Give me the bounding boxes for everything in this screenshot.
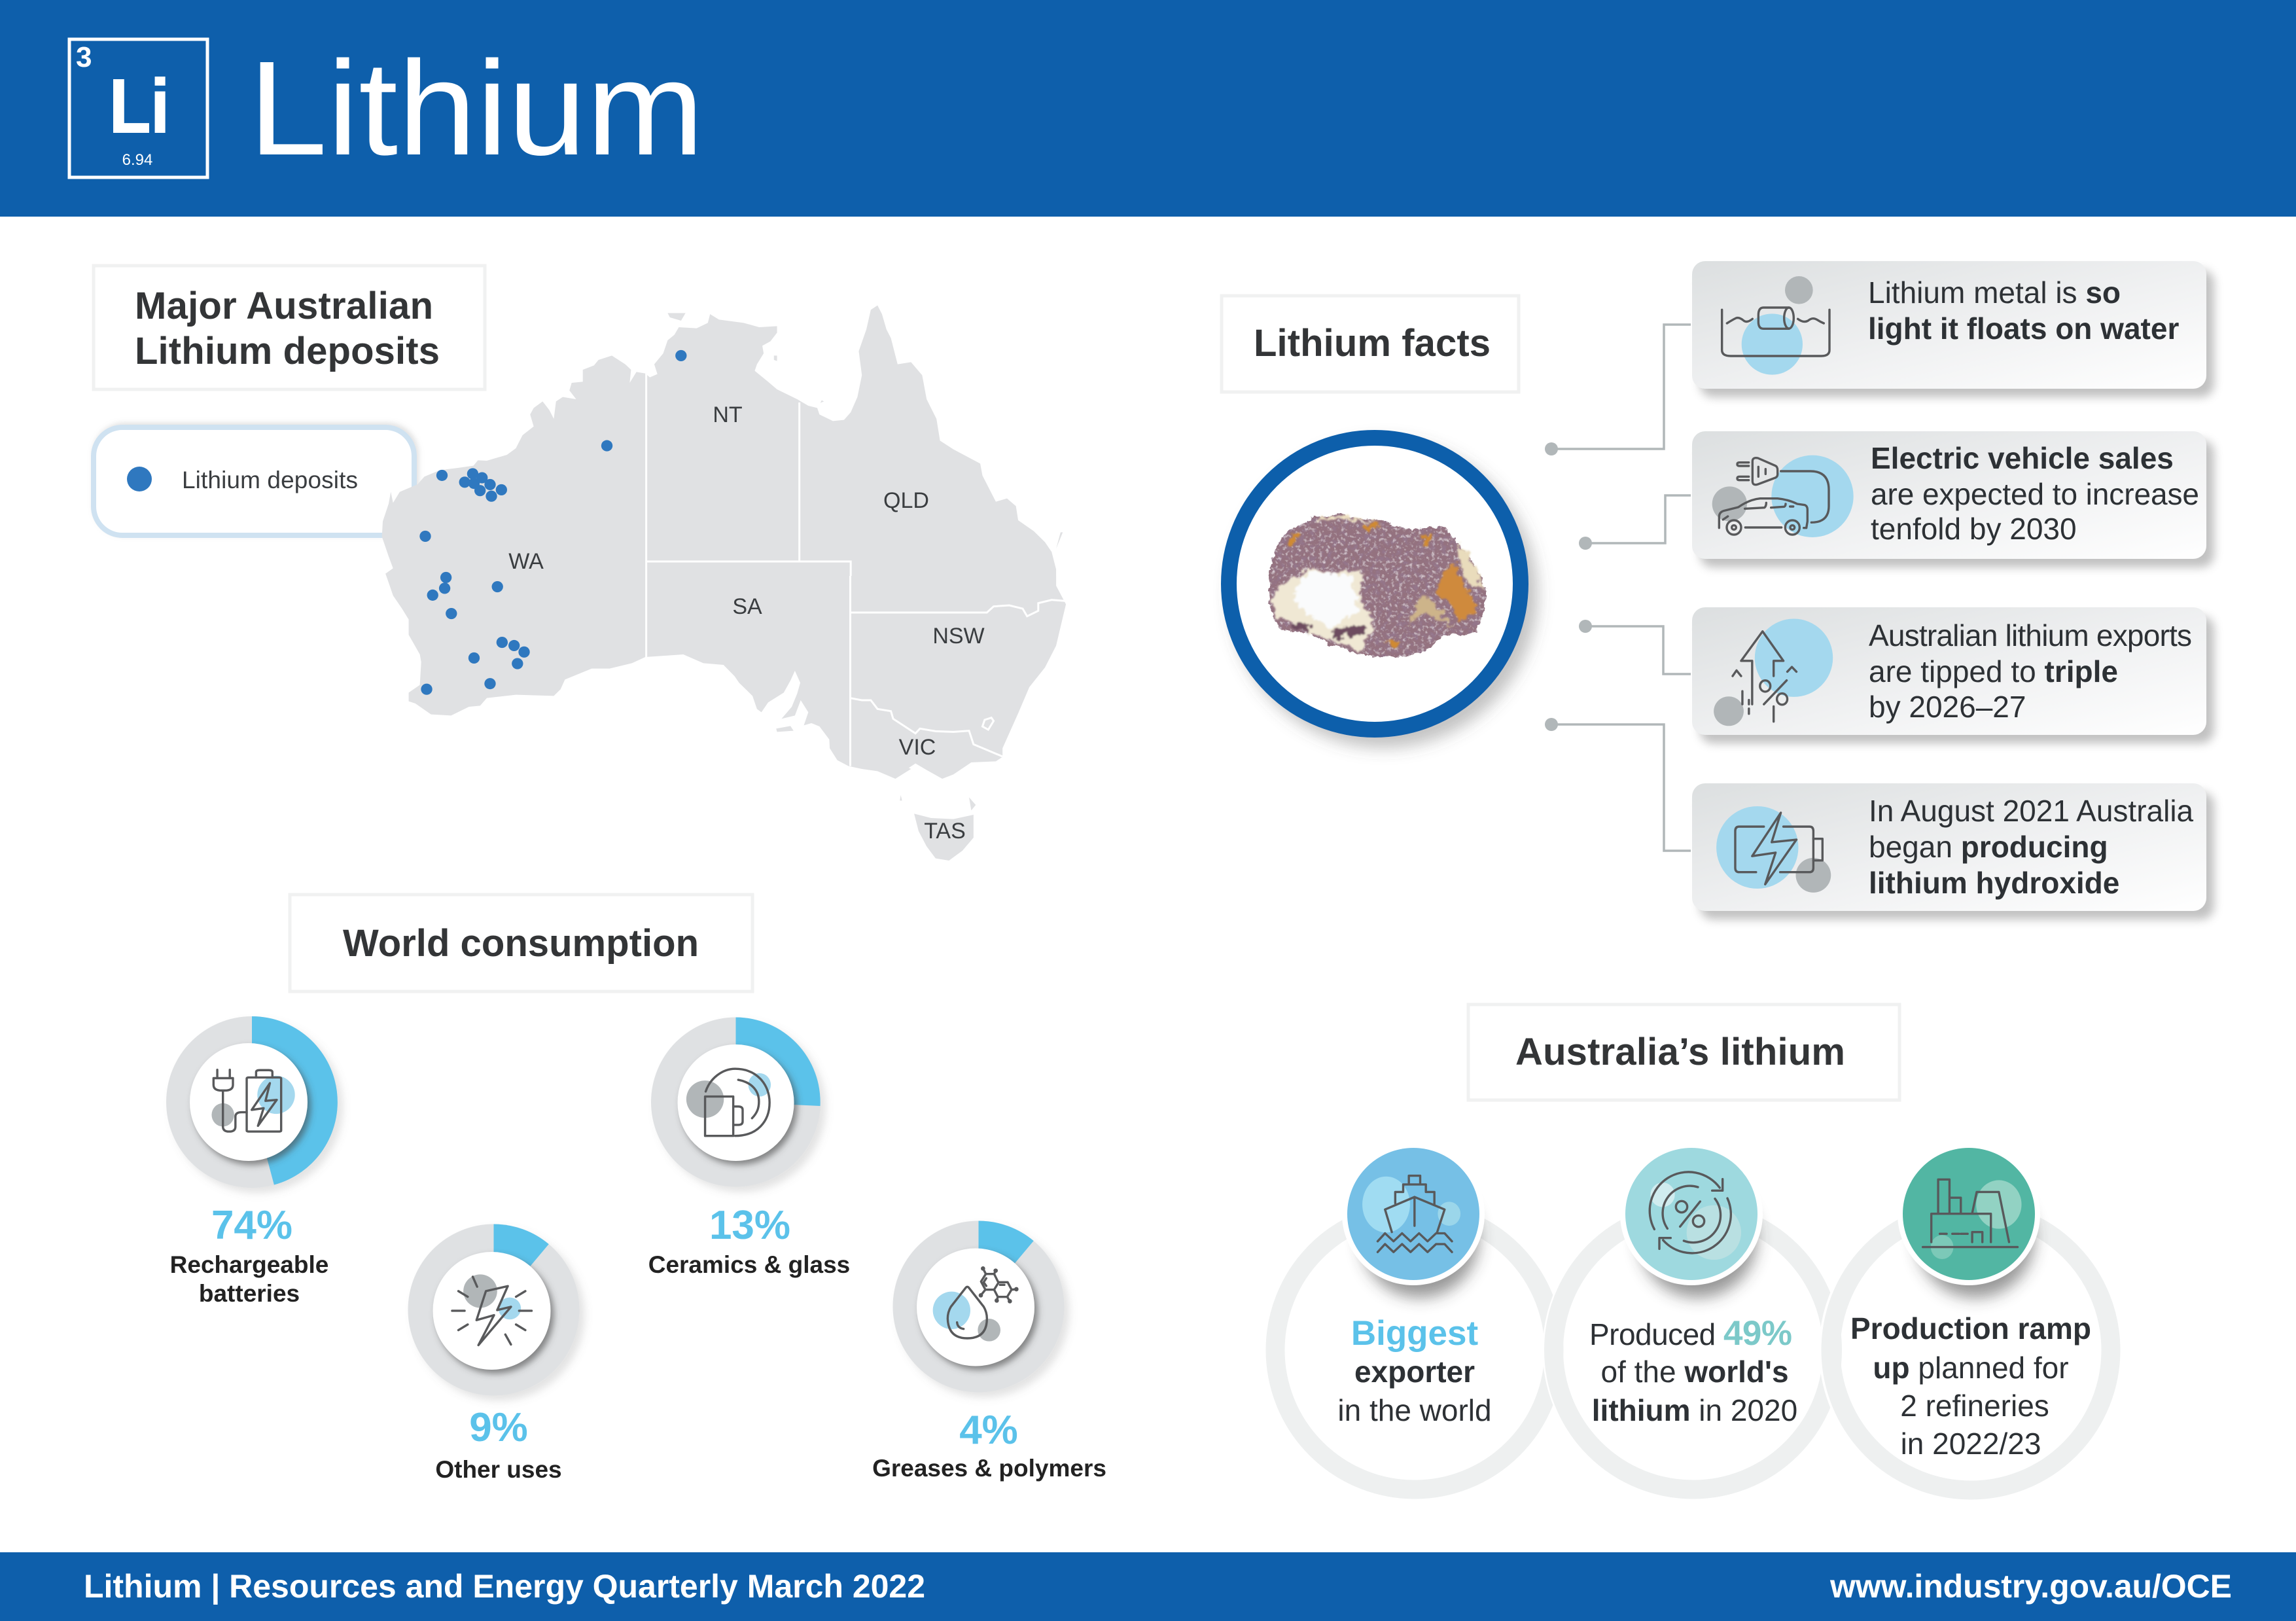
fact card: exports to triple: are tipped to triple [1869,654,2118,688]
text: biggest exporter in the world [1337,1314,1492,1427]
connector 1 [1545,325,1691,455]
text: produced 49% [1589,1314,1797,1427]
heading: world consumption: World consumption [343,922,699,965]
text: production ramp up [1850,1311,2091,1461]
fact card: electric vehicle sales [1692,431,2214,567]
fact card: lithium hydroxide [1692,783,2214,919]
donut: other uses [408,1224,580,1483]
panel: world consumption [166,895,1106,1483]
label: Ceramics & glass [648,1251,850,1278]
connector 4 [1545,718,1691,851]
legend box [94,427,414,535]
icon: battery with bolt [1716,806,1831,893]
value: 13% [709,1203,790,1248]
donut: ceramics and glass [648,1017,850,1278]
connector 3 [1579,620,1691,674]
icon disc: factory [1898,1143,2040,1298]
icon: plug and battery [211,1070,295,1131]
state labels: SA [732,594,762,619]
text: production ramp up: in 2022/23 [1901,1427,2041,1461]
icon: lightning bolt [452,1274,531,1345]
fact card: lithium hydroxide: lithium hydroxide [1869,866,2119,900]
icon: rising arrow with percent [1714,619,1833,726]
fact card: floats on water [1692,261,2214,397]
periodic table element box: Li [109,63,169,149]
map of Australia [382,306,1066,861]
fact card: lithium hydroxide: began producing [1869,830,2108,864]
text: biggest exporter in the world: in the world [1337,1393,1492,1427]
periodic table element box: 6.94 [122,151,152,169]
state labels: QLD [883,488,929,513]
periodic table element box: 3 [76,41,92,73]
state labels: NSW [932,624,985,649]
label: Other uses [435,1456,562,1483]
heading: Australia's lithium: Australia’s lithium [1515,1031,1845,1073]
label: Greases & polymers [872,1455,1106,1482]
state labels: WA [508,549,544,574]
donut: rechargeable batteries [166,1016,338,1307]
ring: biggest exporter [1275,1143,1554,1489]
fact text: Electric vehicle sales [1871,441,2174,475]
ring: share of world production [1544,1143,1843,1499]
state labels: TAS [924,819,966,844]
value: 4% [959,1408,1018,1453]
fact card: electric vehicle sales: are expected to increase [1871,477,2199,511]
text: production ramp up: Production ramp [1850,1311,2091,1345]
icon: metal floating on water [1722,276,1829,375]
title: Lithium [249,33,704,183]
text: biggest exporter in the world: Biggest [1351,1314,1478,1353]
label: batteries [199,1280,300,1307]
text: production ramp up: up planned for [1873,1351,2069,1385]
fact card: floats on water: light it floats on water [1868,312,2179,346]
text: produced 49%: Produced 49% [1589,1314,1792,1353]
heading: major Australian lithium deposits: Major Australian [135,285,433,327]
heading: lithium facts: Lithium facts [1254,322,1491,365]
icon disc: percent cycle [1620,1143,1763,1298]
header banner [0,0,2296,217]
text: produced 49%: lithium in 2020 [1592,1393,1797,1427]
footer source: Lithium | Resources and Energy Quarterly March 2022 [84,1568,925,1605]
panel: lithium facts [1222,261,2214,919]
state labels [508,402,985,844]
fact card: exports to triple: by 2026–27 [1869,690,2026,724]
footer url: www.industry.gov.au/OCE [1829,1568,2232,1605]
deposit markers [419,350,686,695]
heading: world consumption [290,895,752,991]
fact card: electric vehicle sales: tenfold by 2030 [1871,512,2077,546]
fact text: Lithium metal is so [1868,276,2121,310]
heading: Australia's lithium [1468,1005,1899,1100]
icon: mug and plate [686,1069,771,1136]
text: production ramp up: 2 refineries [1900,1389,2049,1423]
legend box: Lithium deposits [182,467,358,493]
icon disc: ship [1342,1143,1485,1298]
ring: production ramp up [1820,1143,2121,1501]
text: produced 49%: of the world's [1600,1355,1789,1389]
heading: major Australian lithium deposits [94,266,485,389]
text: biggest exporter in the world: exporter [1354,1355,1475,1389]
heading: major Australian lithium deposits: Lithium deposits [135,330,440,372]
periodic table element box [69,39,207,177]
fact card: exports to triple [1692,607,2214,743]
state labels: VIC [899,735,936,760]
donut: greases and polymers [872,1220,1106,1482]
label: Rechargeable [170,1251,328,1278]
value: 9% [469,1405,528,1450]
state labels: NT [713,402,743,427]
lithium ore image in blue ring [1229,438,1521,730]
footer banner [0,1552,2296,1621]
fact text: In August 2021 Australia [1869,794,2194,828]
value: 74% [211,1203,292,1248]
icon: oil drop and molecule [933,1266,1019,1342]
panel: Australia's lithium [1275,1005,2121,1501]
fact text: Australian lithium exports [1869,618,2192,652]
heading: lithium facts [1222,296,1519,392]
icon: plug and car [1712,455,1854,537]
panel: major Australian lithium deposits [94,266,1066,861]
connector 2 [1579,495,1691,550]
